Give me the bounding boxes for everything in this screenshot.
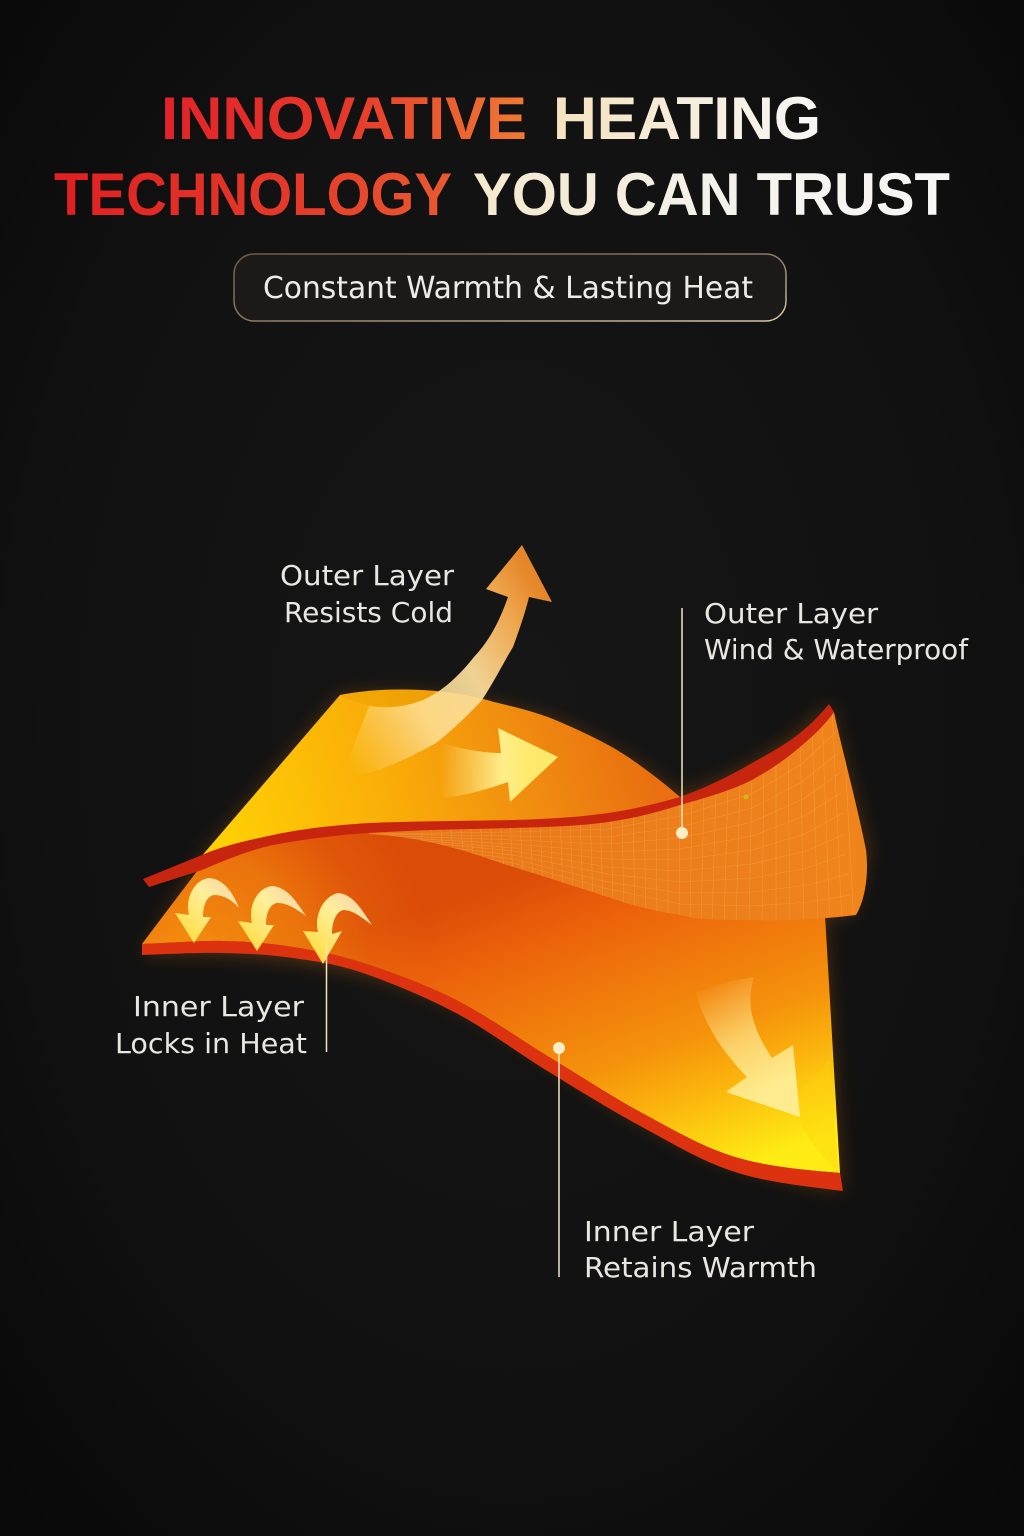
label: outer layer wind and waterproof — [704, 597, 969, 666]
label: outer layer wind and waterproof: Outer Layer — [704, 597, 879, 630]
label: inner layer locks in heat — [115, 990, 307, 1060]
outer layer mesh panel — [369, 700, 867, 925]
label: inner layer retains warmth: Inner Layer — [584, 1215, 755, 1248]
title words: you can trust: YOU CAN TRUST — [473, 161, 950, 228]
subtitle pill: Constant Warmth & Lasting Heat — [263, 271, 753, 306]
outer layer red edge — [143, 704, 834, 887]
inner layer red edge — [142, 941, 843, 1191]
outer layer top panel — [200, 690, 690, 866]
label: inner layer locks in heat: Inner Layer — [133, 990, 305, 1023]
icons: three curved heat arrows — [175, 878, 372, 964]
label: outer layer resists cold — [280, 559, 455, 629]
icon: curved arrow 2 — [238, 886, 306, 951]
diagram: layered fabric — [142, 690, 867, 1191]
label: inner layer retains warmth: Retains Warmth — [584, 1251, 817, 1284]
title word: technology: TECHNOLOGY — [54, 161, 452, 228]
callout line: locks in heat — [326, 945, 328, 1052]
title word: heating: HEATING — [553, 85, 821, 152]
fabric glow — [142, 692, 869, 1191]
subtitle pill — [234, 254, 786, 321]
label: outer layer wind and waterproof: Wind & Waterproof — [704, 633, 969, 666]
mesh speck — [744, 794, 748, 800]
label: inner layer retains warmth — [584, 1215, 817, 1284]
title — [54, 85, 950, 228]
arrow: heat arrow right — [441, 728, 558, 802]
arrow: large heat arrow up — [300, 545, 552, 786]
callout line: wind and waterproof — [676, 608, 688, 839]
callout line: retains warmth — [553, 1042, 565, 1277]
label: outer layer resists cold: Resists Cold — [284, 596, 453, 629]
arrow: heat arrow down — [696, 977, 800, 1117]
label: outer layer resists cold: Outer Layer — [280, 559, 455, 592]
icon: curved arrow 1 — [175, 878, 239, 943]
inner layer panel — [142, 826, 843, 1191]
icon: curved arrow 3 — [303, 893, 372, 964]
title word: innovative: INNOVATIVE — [161, 85, 527, 152]
label: inner layer locks in heat: Locks in Heat — [115, 1027, 307, 1060]
fold shadow on top panel — [340, 690, 436, 706]
